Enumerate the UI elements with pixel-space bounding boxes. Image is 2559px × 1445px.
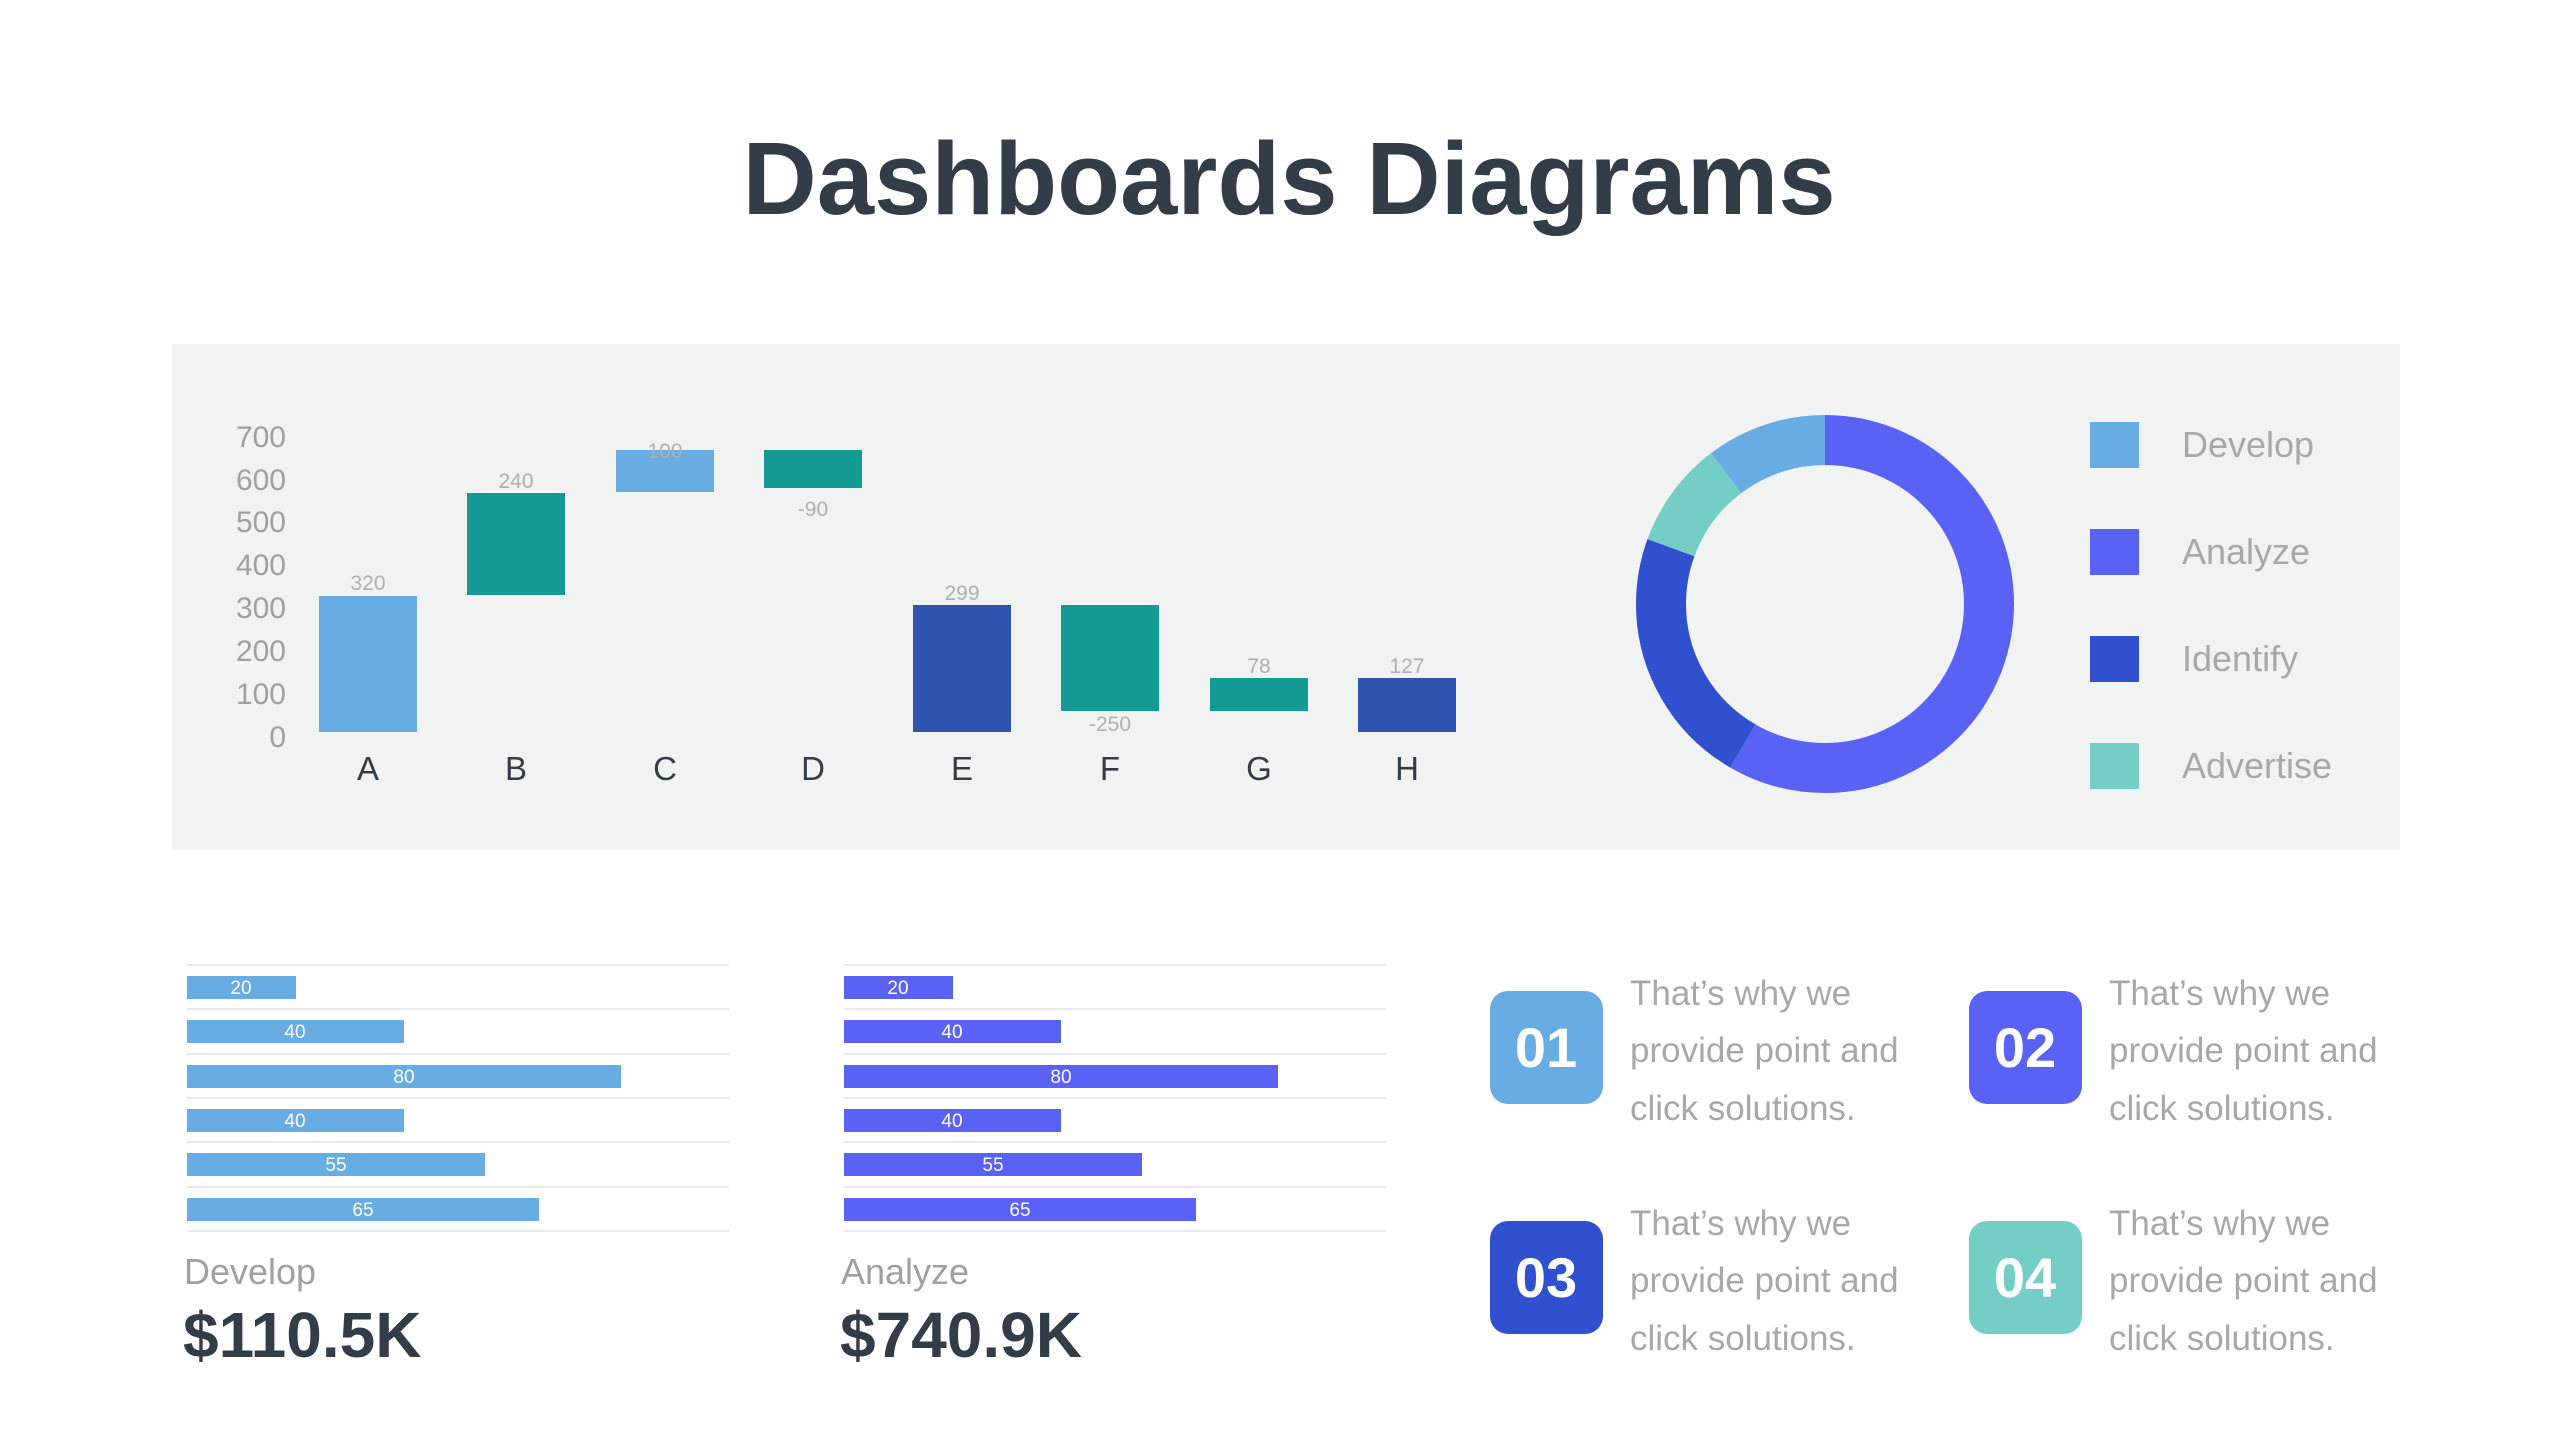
item 02: That’s why we xyxy=(2109,974,2330,1013)
value labels: 299 xyxy=(944,582,980,605)
y axis labels: 100 xyxy=(236,678,286,711)
category labels: E xyxy=(951,750,973,787)
category labels: A xyxy=(357,750,379,787)
item 01: click solutions. xyxy=(1630,1089,1856,1128)
y axis labels: 300 xyxy=(236,592,286,625)
category labels: F xyxy=(1100,750,1120,787)
value: develop: $110.5K xyxy=(183,1299,421,1371)
bar chart: develop: 20 xyxy=(230,978,252,999)
item 02 xyxy=(1969,974,2378,1128)
y axis labels: 400 xyxy=(236,549,286,582)
item 01: That’s why we xyxy=(1630,974,1851,1013)
item 01: provide point and xyxy=(1630,1031,1899,1070)
category labels: D xyxy=(801,750,825,787)
bar chart: develop: 40 xyxy=(284,1111,306,1132)
item 03: That’s why we xyxy=(1630,1204,1851,1243)
item 03: 03 xyxy=(1515,1246,1577,1309)
item 03 xyxy=(1490,1204,1899,1358)
y axis labels: 0 xyxy=(269,721,286,754)
bar chart: develop: 55 xyxy=(325,1155,347,1176)
item 02: click solutions. xyxy=(2109,1089,2335,1128)
item 04 xyxy=(1969,1204,2378,1358)
category labels xyxy=(357,750,1419,787)
item 01: 01 xyxy=(1515,1016,1577,1079)
item 04: click solutions. xyxy=(2109,1319,2335,1358)
value labels: -90 xyxy=(798,498,828,521)
bar chart: develop: 65 xyxy=(352,1200,374,1221)
y axis labels xyxy=(236,421,286,754)
category labels: G xyxy=(1246,750,1272,787)
value labels: 240 xyxy=(498,470,534,493)
value labels: 78 xyxy=(1247,655,1271,678)
item 04: That’s why we xyxy=(2109,1204,2330,1243)
bar chart: analyze: 65 xyxy=(1009,1200,1031,1221)
bar chart: analyze: 55 xyxy=(982,1155,1004,1176)
bar chart: analyze xyxy=(840,965,1386,1371)
legend: Identify xyxy=(2182,638,2298,679)
value labels: 100 xyxy=(647,440,683,463)
item 03: click solutions. xyxy=(1630,1319,1856,1358)
y axis labels: 500 xyxy=(236,506,286,539)
panel: top charts xyxy=(172,344,2400,850)
category labels: C xyxy=(653,750,677,787)
item 03: provide point and xyxy=(1630,1261,1899,1300)
category labels: B xyxy=(505,750,527,787)
legend: Advertise xyxy=(2182,745,2332,786)
value labels xyxy=(350,440,1425,736)
bar chart: develop xyxy=(183,965,729,1371)
value labels: 127 xyxy=(1389,655,1425,678)
bars xyxy=(319,450,1456,732)
value labels: 320 xyxy=(350,572,386,595)
y axis labels: 600 xyxy=(236,464,286,497)
legend: Analyze xyxy=(2182,531,2310,572)
bar chart: analyze: 40 xyxy=(941,1022,963,1043)
donut chart xyxy=(1661,440,1989,768)
item 01 xyxy=(1490,974,1899,1128)
bar chart: develop: 40 xyxy=(284,1022,306,1043)
bar chart: analyze: 80 xyxy=(1050,1067,1072,1088)
item 02: provide point and xyxy=(2109,1031,2378,1070)
value: analyze: $740.9K xyxy=(840,1299,1082,1371)
y axis labels: 200 xyxy=(236,635,286,668)
category labels: H xyxy=(1395,750,1419,787)
item 02: 02 xyxy=(1994,1016,2056,1079)
y axis labels: 700 xyxy=(236,421,286,454)
waterfall chart xyxy=(236,421,1456,787)
title: Dashboards Diagrams xyxy=(742,121,1836,236)
item 04: 04 xyxy=(1994,1246,2056,1309)
bar chart: analyze: 20 xyxy=(887,978,909,999)
label: develop: Develop xyxy=(184,1251,316,1292)
legend: Develop xyxy=(2182,424,2314,465)
bar chart: analyze: 40 xyxy=(941,1111,963,1132)
legend xyxy=(2090,422,2332,789)
bar chart: develop: 80 xyxy=(393,1067,415,1088)
item 04: provide point and xyxy=(2109,1261,2378,1300)
value labels: -250 xyxy=(1089,713,1131,736)
label: analyze: Analyze xyxy=(841,1251,969,1292)
